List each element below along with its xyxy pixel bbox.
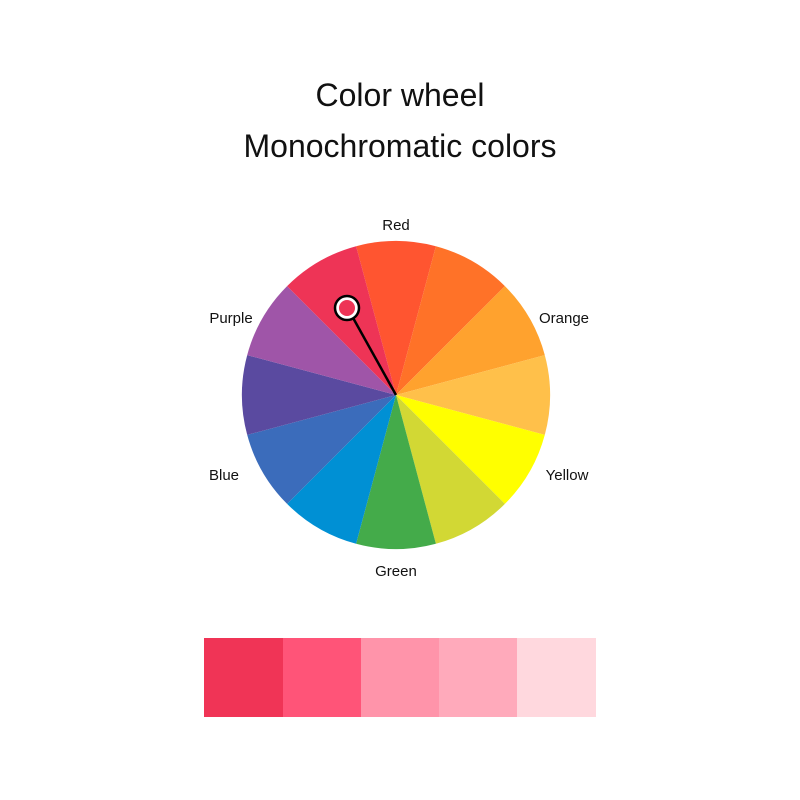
wheel labels: Blue — [209, 467, 239, 484]
title: Color wheel — [316, 77, 484, 113]
wheel labels: Red — [382, 217, 410, 234]
wheel labels — [209, 217, 589, 580]
wheel labels: Orange — [539, 310, 589, 327]
wheel labels: Yellow — [546, 467, 589, 484]
pointer marker — [335, 296, 396, 395]
color wheel — [242, 241, 550, 549]
wheel labels: Green — [375, 563, 417, 580]
wheel labels: Purple — [209, 310, 253, 327]
monochromatic swatches — [204, 638, 596, 717]
title: Monochromatic colors — [244, 128, 556, 164]
title — [244, 77, 556, 164]
